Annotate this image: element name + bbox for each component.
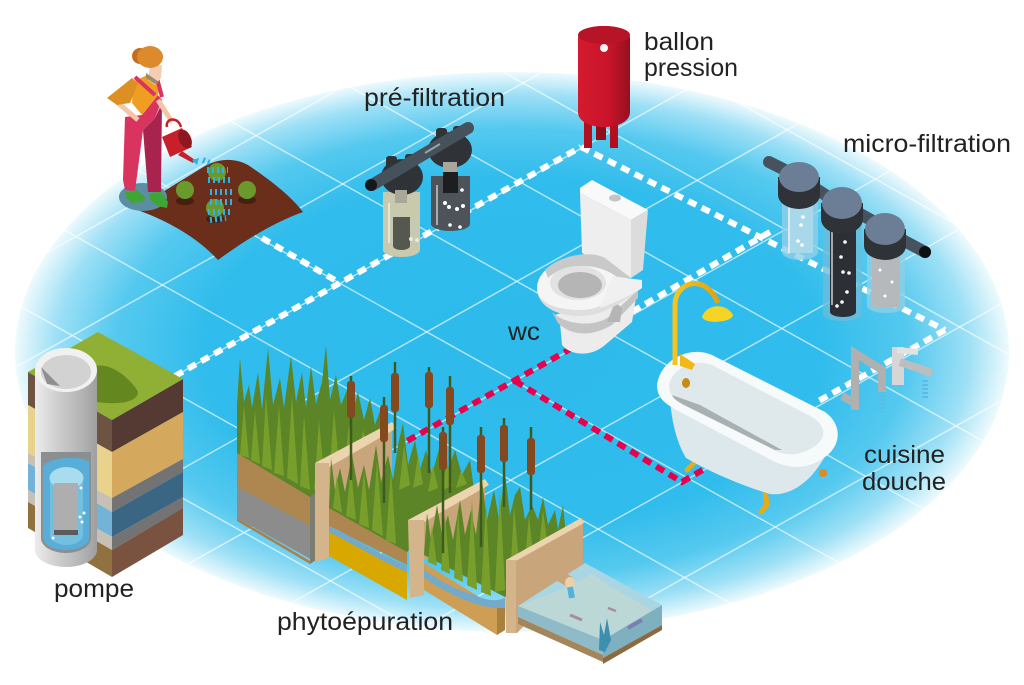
grass top (28, 332, 183, 420)
label: pre-filtration: pré-filtration (364, 84, 505, 112)
pump body (54, 483, 78, 535)
forearm (118, 103, 138, 120)
back filter (428, 126, 472, 231)
pipes: clean water dashed lines (175, 147, 945, 403)
label: cuisine douche (862, 441, 946, 496)
water drops (203, 160, 232, 220)
sleeve (107, 78, 138, 105)
well pump: ground cross-section (28, 332, 183, 577)
cartridge 1 (782, 195, 818, 260)
watering arm (158, 100, 172, 122)
caps (778, 177, 820, 209)
label: wc: wc (507, 318, 540, 346)
rim (657, 352, 838, 467)
label: ballon pression: ballon (644, 28, 714, 56)
label: ballon pression (644, 28, 738, 82)
shower pipe (675, 284, 718, 365)
shower head (702, 306, 733, 322)
head and hair (148, 65, 162, 85)
left face layers (28, 372, 112, 577)
bathtub with gold shower (657, 284, 838, 512)
tap (680, 354, 695, 370)
short tap (892, 347, 904, 385)
bed 3 (424, 473, 566, 635)
seat lip (537, 288, 642, 316)
concrete well (35, 348, 97, 567)
bed 3 grass (424, 473, 566, 597)
left leg and bib (123, 95, 162, 191)
label: ballon pression: pression (644, 54, 738, 82)
pre-filtration: two filter cartridges on a pipe (365, 126, 472, 257)
label: cuisine douche: douche (862, 468, 946, 496)
tub body (670, 400, 830, 494)
bed 2 grass (329, 423, 474, 552)
phytoepuration: three planted beds and pond (237, 345, 662, 664)
gold legs (687, 455, 767, 512)
water plant (599, 618, 611, 652)
plants (176, 163, 256, 223)
micro-filtration: three cartridges (769, 162, 931, 321)
wall 3 (506, 518, 584, 633)
front filter (381, 154, 423, 257)
seat (537, 254, 622, 310)
label: phytoepuration: phytoépuration (277, 608, 453, 636)
wall 1 (315, 422, 397, 562)
outflow pipe (553, 572, 570, 582)
soil patch (135, 160, 303, 260)
faucets (842, 347, 932, 412)
pressure tank (578, 26, 630, 148)
label: micro-filtration: micro-filtration (843, 130, 1011, 158)
straps (135, 77, 162, 97)
shoes (126, 190, 145, 203)
cattails (347, 362, 535, 553)
fish (570, 615, 582, 620)
window with water (41, 452, 91, 553)
shadow (119, 183, 167, 211)
connecting pipes (769, 162, 925, 252)
right leg (143, 103, 162, 192)
toilet (537, 180, 648, 354)
watering can (162, 119, 199, 165)
label: pompe: pompe (54, 575, 134, 603)
bed 1 grass (237, 345, 392, 497)
cistern (580, 193, 631, 278)
tall tap (842, 353, 882, 410)
pipe (372, 128, 468, 185)
bed 1 (237, 345, 392, 564)
garden: woman watering plants (107, 46, 303, 260)
cartridge 2 (823, 225, 862, 321)
bed 2 (329, 423, 474, 600)
pipes: wastewater red dashed lines (400, 348, 716, 482)
label: cuisine douche: cuisine (864, 441, 945, 469)
torso shirt (132, 75, 160, 115)
pond (518, 563, 662, 664)
wall 2 (408, 479, 489, 598)
basin (669, 363, 823, 454)
cartridge 3 (867, 250, 905, 313)
pedestal (555, 285, 638, 354)
gauge (600, 44, 608, 52)
right face layers (112, 379, 183, 577)
